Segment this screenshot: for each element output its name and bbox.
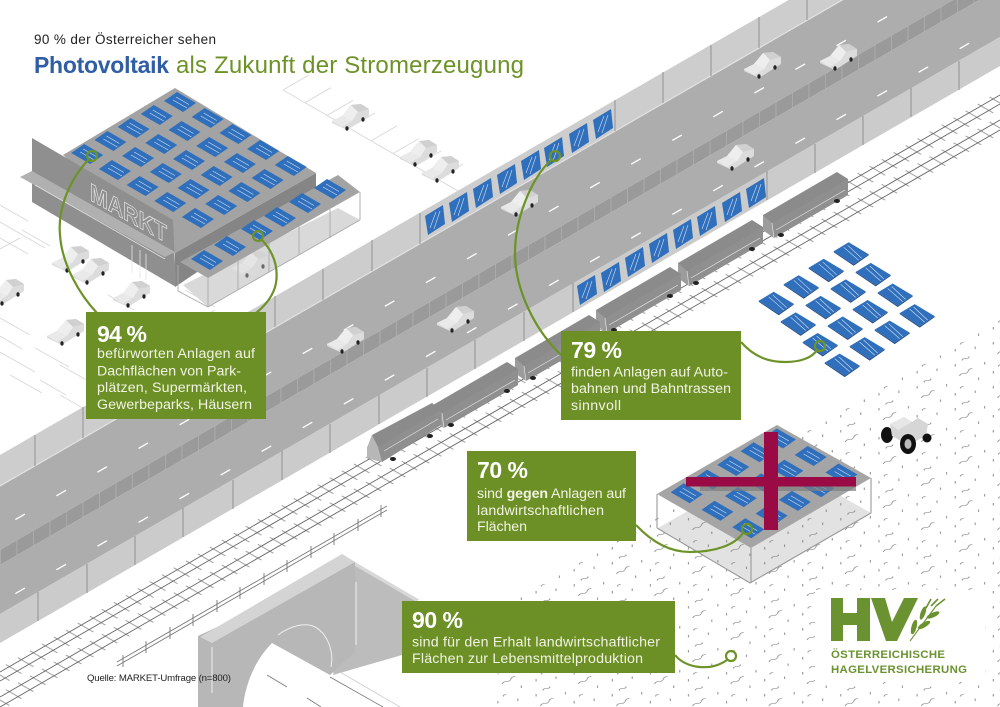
heading: main title: als Zukunft der Stromerzeugung xyxy=(176,52,524,79)
connector curves xyxy=(60,151,825,667)
cars in the parking lot and on the road xyxy=(0,44,857,354)
logo: Österreichische Hagelversicherung xyxy=(815,590,985,682)
logo wordmark: ÖSTERREICHISCHE xyxy=(831,648,945,661)
heading: main title: Photovoltaik xyxy=(34,52,169,78)
callout: 70 %: landwirtschaftlichen xyxy=(477,503,604,519)
callout: 94 %: Dachflächen von Park- xyxy=(97,364,241,380)
wing wall top xyxy=(342,554,420,601)
upper noise wall xyxy=(0,0,1000,486)
callout: 79 %: sinnvoll xyxy=(571,398,621,414)
logo: Österreichische Hagelversicherung: HAGELVERSICHERUNG xyxy=(831,664,967,676)
roof xyxy=(657,425,871,548)
awning xyxy=(20,171,175,257)
logo wheat xyxy=(910,599,945,641)
callout: 94 %: 94 % xyxy=(97,321,147,347)
railway bridge xyxy=(198,554,420,707)
lower wall dividers xyxy=(38,61,959,621)
bridge top xyxy=(200,554,355,643)
solar panels on upper noise wall xyxy=(425,109,613,235)
carport roof xyxy=(180,175,360,278)
train xyxy=(367,172,848,462)
carport posts xyxy=(178,192,360,307)
wing wall xyxy=(333,564,417,675)
upper wall dividers xyxy=(35,0,807,466)
tractor xyxy=(881,417,932,454)
callout: 79 % xyxy=(561,331,741,420)
callout: 94 %: Gewerbeparks, Häusern xyxy=(97,397,252,413)
callout: 70 %: Flächen xyxy=(477,519,527,535)
parking lot markings xyxy=(0,75,485,411)
locomotive xyxy=(367,403,441,462)
callout: 90 %: Flächen zur Lebensmittelproduktion xyxy=(412,651,643,667)
floor shadow xyxy=(658,460,871,583)
lane markings upper xyxy=(0,0,1000,543)
market building xyxy=(20,88,360,307)
callout: 90 % xyxy=(402,601,675,673)
field texture xyxy=(490,320,1000,707)
roof solar panels xyxy=(71,92,307,228)
market lettering: MARKT xyxy=(90,178,167,249)
carriageway upper xyxy=(0,0,1000,550)
callout: 70 %: 70 % xyxy=(477,457,528,483)
source note: Quelle: MARKET-Umfrage (n=800) xyxy=(87,673,231,684)
road edge line xyxy=(0,0,1000,486)
posts xyxy=(657,478,871,583)
road under bridge xyxy=(267,675,383,707)
callout: 90 %: 90 % xyxy=(412,607,463,633)
roof xyxy=(63,88,316,253)
carport solar panels xyxy=(191,179,346,270)
ground-mounted solar array xyxy=(759,242,935,377)
arch lines xyxy=(212,582,356,693)
bridge face xyxy=(198,562,355,707)
carport floor xyxy=(183,208,360,307)
callout: 79 %: bahnen und Bahntrassen xyxy=(571,381,731,397)
parked car under carport xyxy=(232,251,269,278)
callout: 70 %: sind gegen Anlagen auf xyxy=(477,486,626,502)
callout: 70 % xyxy=(467,451,636,541)
side wall xyxy=(175,173,316,287)
solar panels on lower noise wall xyxy=(577,178,766,305)
field marks over floor xyxy=(658,460,871,583)
callout: 94 % xyxy=(86,312,266,419)
heading: intro line: 90 % der Österreicher sehen xyxy=(34,32,216,47)
callout: 94 %: plätzen, Supermärkten, xyxy=(97,380,247,396)
callout: 90 %: sind für den Erhalt landwirtschaftlicher xyxy=(412,634,660,650)
callout: 79 %: 79 % xyxy=(571,337,622,363)
red cross xyxy=(686,432,856,530)
central barrier xyxy=(0,0,1000,565)
logo letters HV xyxy=(831,598,918,641)
agrivoltaic structure on farmland xyxy=(657,425,871,583)
facade lines xyxy=(35,185,165,280)
panels xyxy=(671,428,858,538)
front wall xyxy=(32,138,176,287)
fence xyxy=(117,505,387,667)
callout: 94 %: befürworten Anlagen auf xyxy=(97,346,255,362)
callout: 79 %: finden Anlagen auf Auto- xyxy=(571,364,728,380)
